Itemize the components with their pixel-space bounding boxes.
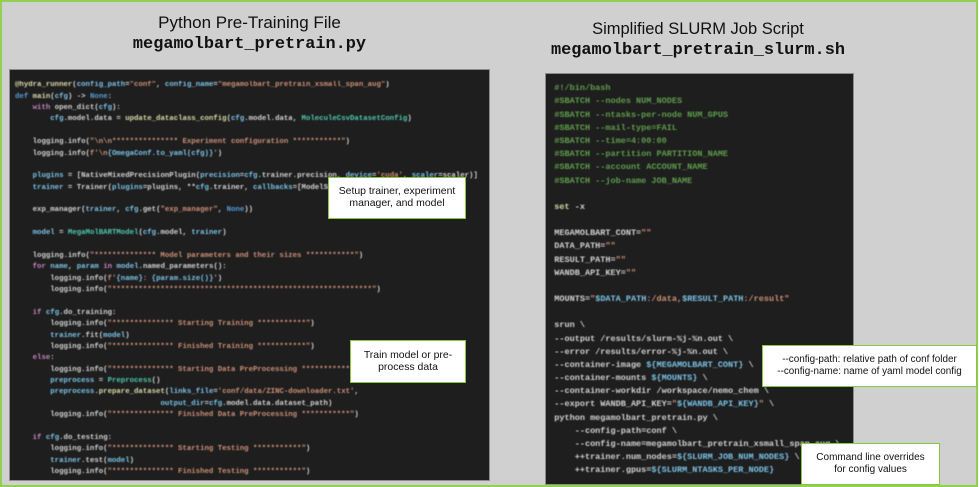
callout: config path and name <box>762 345 977 387</box>
panel: Python pre-training file <box>0 0 495 487</box>
callout: setup trainer <box>328 177 466 219</box>
code block: shell script: #!/bin/bash #SBATCH --nodes NUM_NODES #SBATCH --ntasks-per-node NUM_GPUS #SBATCH --mail-type=FAIL #SBATCH --time=4:00:00 #SBATCH --partition PARTITION_NAME #SBATCH --account ACCOUNT_NAME #SBATCH --job-name JOB_NAME set -x MEGAMOLBART_CONT="" DATA_PATH="" RESULT_PATH="" WANDB_API_KEY="" MOUNTS="$DATA_PATH:/data,$RESULT_PATH:/result" srun \ --output /results/slurm-%j-%n.out \ --error /results/error-%j-%n.out \ --container-image ${MEGAMOLBART_CONT} \ --container-mounts ${MOUNTS} \ --container-workdir /workspace/nemo_chem \ --export WANDB_API_KEY="${WANDB_API_KEY}" \ python megamolbart_pretrain.py \ --config-path=conf \ --config-name=megamolbart_pretrain_xsmall_span_aug \ ++trainer.num_nodes=${SLURM_JOB_NUM_NODES} \ ++trainer.gpus=${SLURM_NTASKS_PER_NODE} <box>554 83 840 475</box>
callout: setup trainer: manager, and model <box>349 198 445 209</box>
callout: train model: process data <box>378 362 438 372</box>
panel: SLURM job script <box>495 0 978 487</box>
callout: command line overrides <box>801 443 940 485</box>
callout: command line overrides: for config values <box>834 464 907 475</box>
callout: config path and name: --config-path: relative path of conf folder <box>782 354 957 365</box>
heading: simplified SLURM job script: Simplified SLURM Job Script <box>592 20 804 38</box>
code block: Python source: @hydra_runner(config_path="conf", config_name="megamolbart_pretrain_xsmall_span_aug") def main(cfg) -> None: with open_dict(cfg): cfg.model.data = update_dataclass_config(cfg.model.data, MoleculeCsvDatasetConfig) logging.info("\n\n*************** Experiment configuration ***********") logging.info(f'\n{OmegaConf.to_yaml(cfg)}') plugins = [NativeMixedPrecisionPlugin(precision=cfg.trainer.precision, device='cuda', scaler=scaler)] trainer = Trainer(plugins=plugins, **cfg.trainer, callbacks=[ModelSummary(max_depth=3)]) exp_manager(trainer, cfg.get("exp_manager", None)) model = MegaMolBARTModel(cfg.model, trainer) logging.info("************** Model parameters and their sizes ***********") for name, param in model.named_parameters(): logging.info(f'{name}: {param.size()}') logging.info("***********************************************************") if cfg.do_training: logging.info("************** Starting Training ***********") trainer.fit(model) logging.info("************** Finished Training ***********") else: logging.info("************** Starting Data PreProcessing ***********") preprocess = Preprocess() preprocess.prepare_dataset(links_file='conf/data/ZINC-downloader.txt', output_dir=cfg.model.data.dataset_path) logging.info("************** Finished Data PreProcessing ***********") if cfg.do_testing: logging.info("************** Starting Testing ***********") trainer.test(model) logging.info("************** Finished Testing ***********") <box>15 81 478 476</box>
callout: train model: Train model or pre- <box>364 350 452 360</box>
callout: config path and name: --config-name: name of yaml model config <box>777 366 962 377</box>
heading: Python pre-training file <box>133 13 366 54</box>
heading: simplified SLURM job script <box>551 20 845 60</box>
callout: train model <box>350 340 466 383</box>
heading: simplified SLURM job script: megamolbart_pretrain_slurm.sh <box>551 41 845 60</box>
callout: setup trainer: Setup trainer, experiment <box>339 186 455 197</box>
heading: Python pre-training file: megamolbart_pretrain.py <box>133 35 366 54</box>
heading: Python pre-training file: Python Pre-Training File <box>158 13 341 32</box>
callout: command line overrides: Command line overrides <box>816 452 925 463</box>
